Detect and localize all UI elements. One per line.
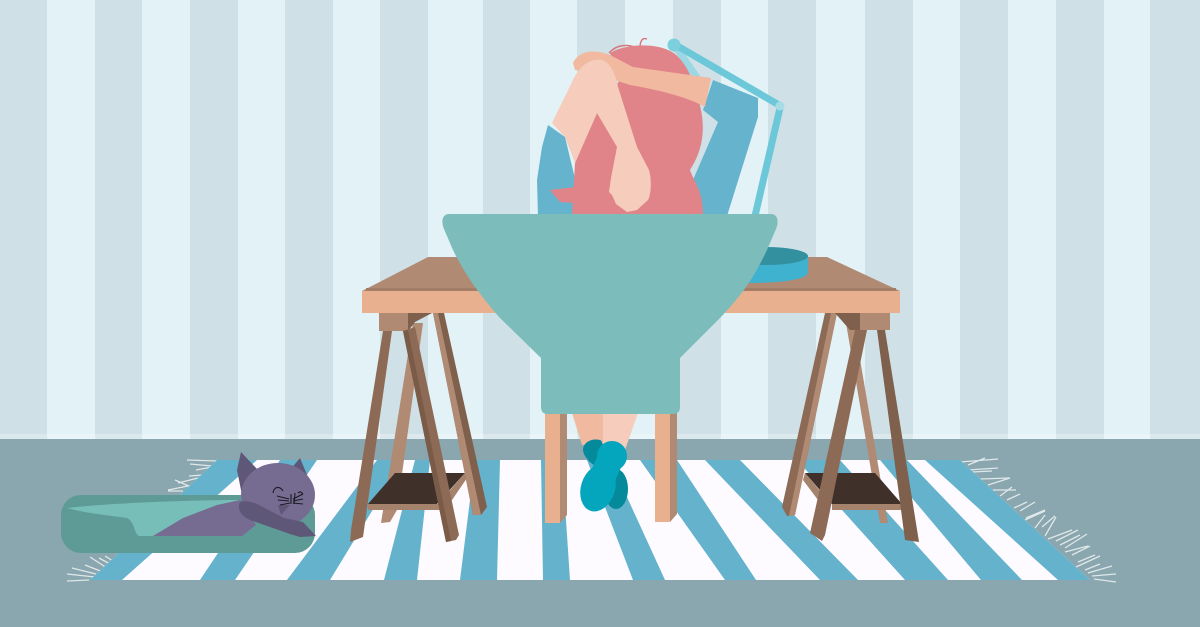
left sawhorse <box>350 313 487 542</box>
top block <box>860 313 890 330</box>
feet in teal socks <box>574 439 628 516</box>
desk top surface <box>362 257 900 291</box>
chair legs <box>545 410 677 523</box>
desk lamp arm <box>668 38 784 216</box>
shelf <box>805 473 902 504</box>
person <box>537 39 711 216</box>
striped wall <box>0 0 1200 440</box>
person's shins <box>572 413 638 450</box>
pink tie <box>550 187 575 203</box>
cat chin shade <box>278 505 290 515</box>
centre leg <box>403 327 459 542</box>
shelf <box>368 473 465 504</box>
centre leg <box>810 330 867 541</box>
cat <box>153 452 316 537</box>
desk <box>362 257 900 313</box>
far-right leg <box>433 313 487 515</box>
cat arm <box>239 501 316 537</box>
left sleeve <box>537 125 577 216</box>
bent arm <box>573 52 711 107</box>
rug fringe right <box>960 458 1116 582</box>
chair back <box>693 80 758 216</box>
desk front edge <box>362 291 900 313</box>
floor <box>0 439 1200 627</box>
outer leg <box>350 331 392 542</box>
top block <box>379 313 408 331</box>
cat face <box>273 487 303 505</box>
hanging arm and hand <box>552 60 651 212</box>
rug <box>90 460 1090 580</box>
far-left leg <box>782 313 837 516</box>
cat ears <box>237 452 310 495</box>
lamp base <box>722 247 808 283</box>
rug fringe left <box>67 460 217 581</box>
outer leg <box>877 330 919 542</box>
torso and hair <box>572 45 703 216</box>
cat bed <box>61 495 315 553</box>
back leg <box>846 323 888 523</box>
back leg <box>381 323 423 523</box>
seat funnel <box>442 214 778 414</box>
cat head <box>241 463 315 527</box>
right sawhorse <box>782 313 919 542</box>
cat body <box>153 500 256 536</box>
hair strands <box>609 39 647 53</box>
